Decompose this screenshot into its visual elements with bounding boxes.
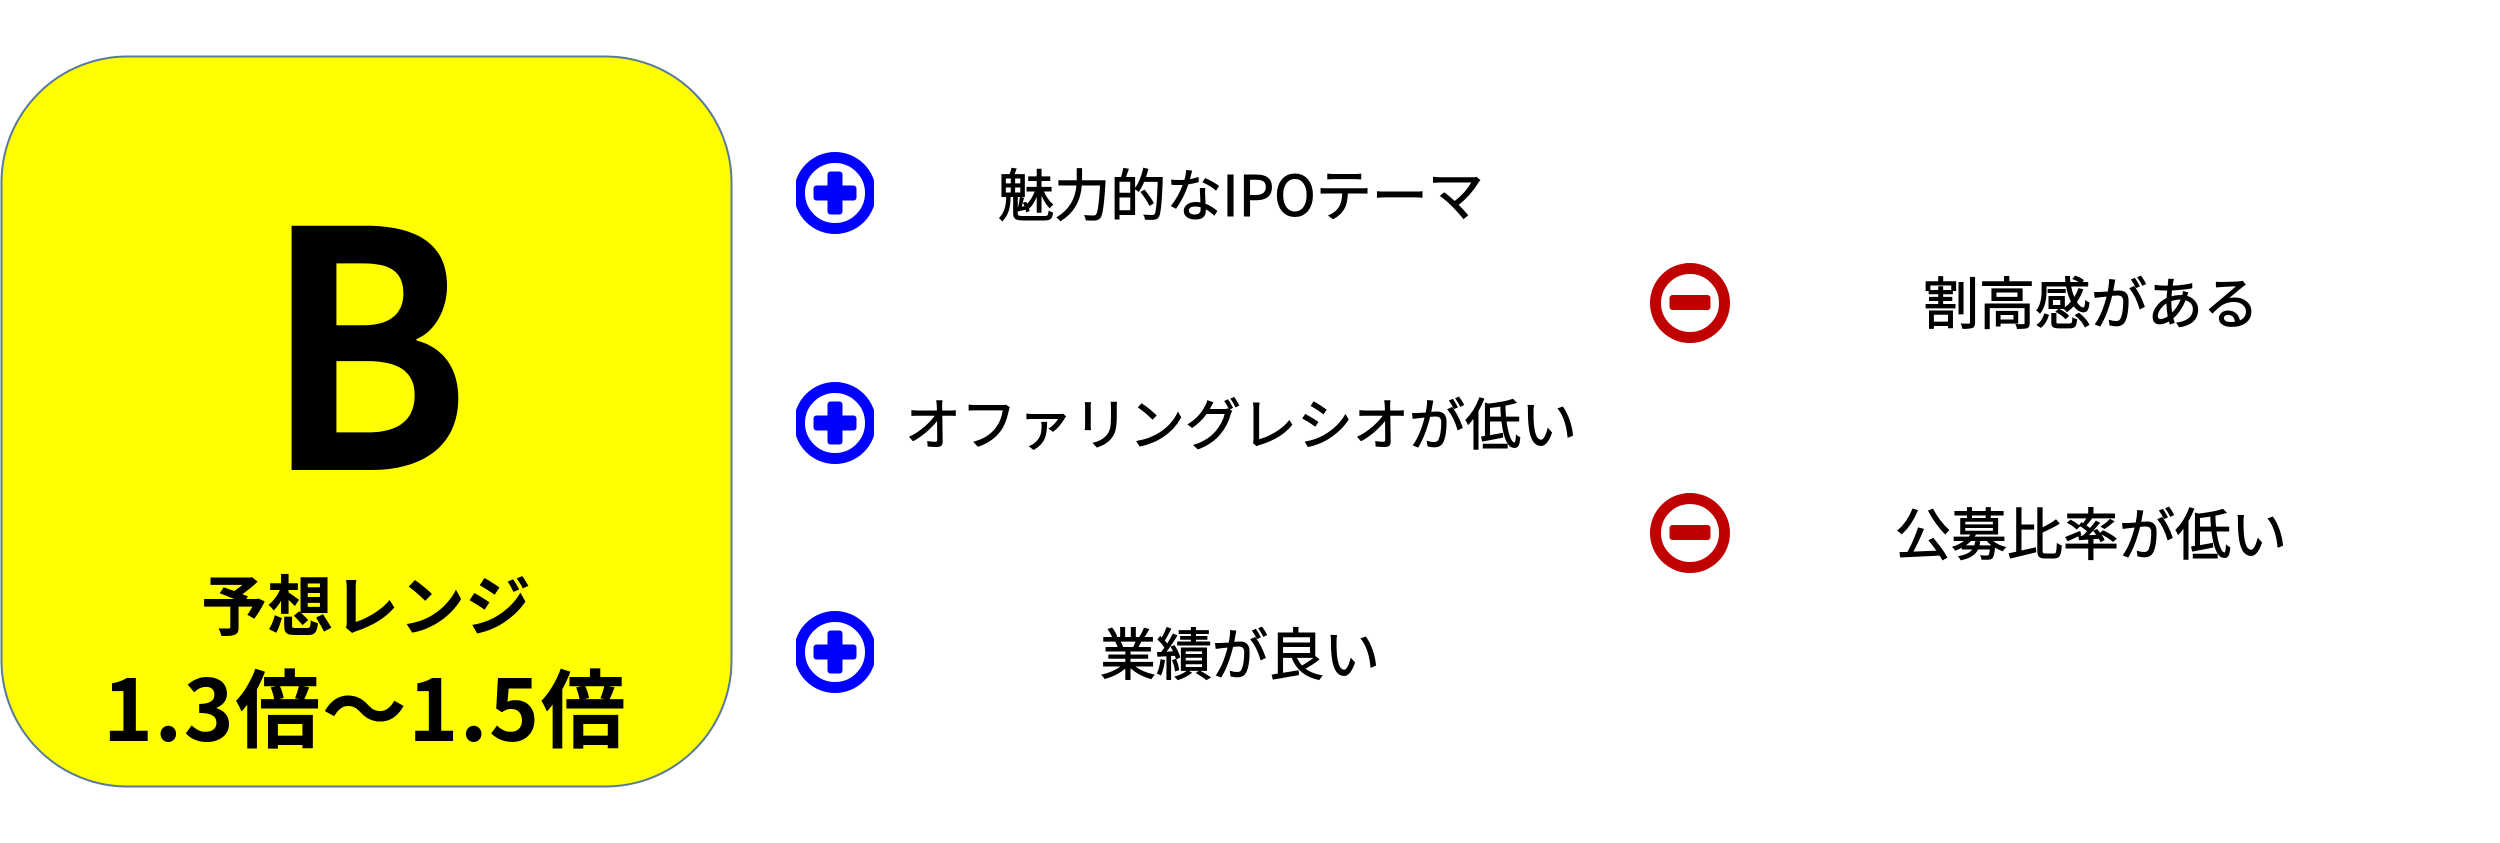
value: range multiple: 1.3倍〜1.5倍: [103, 643, 627, 766]
icon: minus 1: [1656, 268, 1724, 338]
panel: positive factors: [800, 152, 1577, 692]
rating letter B: B: [264, 89, 470, 566]
text: low offering ratio: オファリングレシオが低い: [905, 381, 1577, 462]
text: low public offering ratio: 公募比率が低い: [1895, 491, 2287, 572]
label: expected range: 予想レンジ: [201, 554, 531, 650]
yellow rounded square: [2, 56, 732, 786]
text: attractive IPO theme: 魅力的なIPOテーマ: [998, 152, 1484, 233]
icon: minus 2: [1656, 498, 1724, 568]
icon: plus 1: [800, 158, 870, 228]
text: good earnings: 業績が良い: [1100, 611, 1380, 692]
panel: negative factors: [1656, 260, 2287, 572]
icon: plus 3: [800, 616, 870, 688]
icon: plus 2: [800, 388, 870, 458]
panel: rating card: [2, 56, 732, 786]
text: overvalued: 割高感がある: [1923, 260, 2259, 341]
